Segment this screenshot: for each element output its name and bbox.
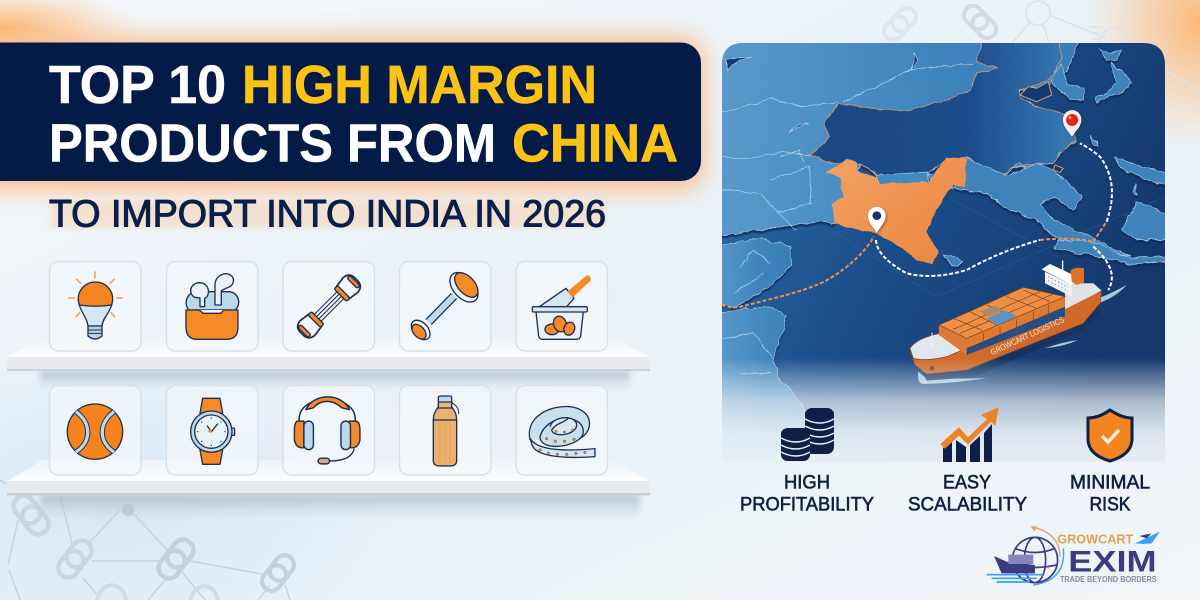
icon: chopper and container	[532, 275, 591, 339]
icon: earbuds case	[186, 274, 239, 339]
label	[908, 472, 1027, 516]
title banner	[0, 36, 705, 191]
title line 1	[49, 55, 597, 115]
label: RISK	[1090, 494, 1130, 516]
logo swoosh arrows	[1032, 527, 1060, 557]
ship bow deck	[910, 333, 967, 360]
label: EASY	[943, 472, 991, 494]
ship wake	[918, 285, 1127, 384]
map land: China	[810, 37, 1077, 177]
icon: growth chart	[941, 408, 998, 462]
route: white dashed	[876, 143, 1112, 290]
title line 2: PRODUCTS FROM	[49, 114, 496, 174]
product cards	[50, 262, 608, 475]
subtitle: TO IMPORT INTO INDIA IN 2026	[49, 194, 606, 236]
shelf 2	[7, 460, 650, 521]
route: orange dashed	[722, 222, 1107, 308]
logo ship	[994, 556, 1035, 573]
icon: coin stacks	[781, 408, 834, 461]
icon: tennis ball	[67, 404, 123, 459]
logo globe	[1012, 537, 1058, 583]
benefit: high profitability	[740, 408, 874, 516]
background network pattern: top right	[880, 0, 1200, 92]
logo: Growcart Exim	[987, 526, 1160, 585]
label: PROFITABILITY	[740, 494, 874, 516]
logo text: Exim: EXIM	[1068, 546, 1157, 579]
benefit: easy scalability	[908, 408, 1027, 516]
label: HIGH	[784, 472, 830, 494]
title line 2: CHINA	[512, 114, 678, 174]
map land: South-East Asia	[943, 135, 1168, 266]
label: SCALABILITY	[908, 494, 1027, 516]
logo plane	[1135, 532, 1160, 544]
map land: Korea and Japan	[1050, 50, 1133, 103]
ship hull	[923, 305, 1100, 381]
ship bridge	[1065, 283, 1102, 309]
shelf 1	[7, 337, 650, 391]
map highlight: India	[827, 157, 967, 265]
map land: Eurasia and Africa	[722, 43, 1081, 424]
pin: China	[1063, 110, 1081, 137]
icon: shield	[1088, 410, 1132, 461]
title line 1: TOP 10	[49, 55, 226, 115]
icon: measuring tape	[529, 406, 595, 457]
icon: facial roller	[408, 267, 484, 343]
label	[740, 472, 874, 516]
label	[1070, 472, 1150, 516]
logo text: Growcart: GROWCART	[1057, 531, 1133, 546]
logo text: tagline: TRADE BEYOND BORDERS	[1060, 574, 1157, 584]
title line 1: HIGH MARGIN	[242, 55, 597, 115]
container ship	[909, 261, 1127, 384]
icon: light bulb	[69, 272, 122, 339]
icon: wrist watch	[191, 398, 235, 464]
map borders	[720, 53, 1080, 373]
icon: bamboo bottle	[433, 396, 459, 466]
ship containers	[939, 325, 967, 355]
map land: Nepal and Bangladesh	[877, 172, 953, 188]
panel: shipping map	[713, 33, 1168, 473]
benefit: minimal risk	[1070, 410, 1150, 516]
background network pattern: bottom left	[0, 480, 298, 600]
ship name: GROWCART LOGISTICS	[989, 314, 1066, 357]
map detail: Bohai coast	[1020, 82, 1063, 173]
label: MINIMAL	[1070, 472, 1150, 494]
map grid lines	[780, 196, 1165, 396]
icon: headset	[294, 397, 360, 464]
pin: India	[868, 207, 886, 233]
icon: resistance band	[294, 272, 364, 341]
map bottom fade	[722, 358, 1165, 466]
